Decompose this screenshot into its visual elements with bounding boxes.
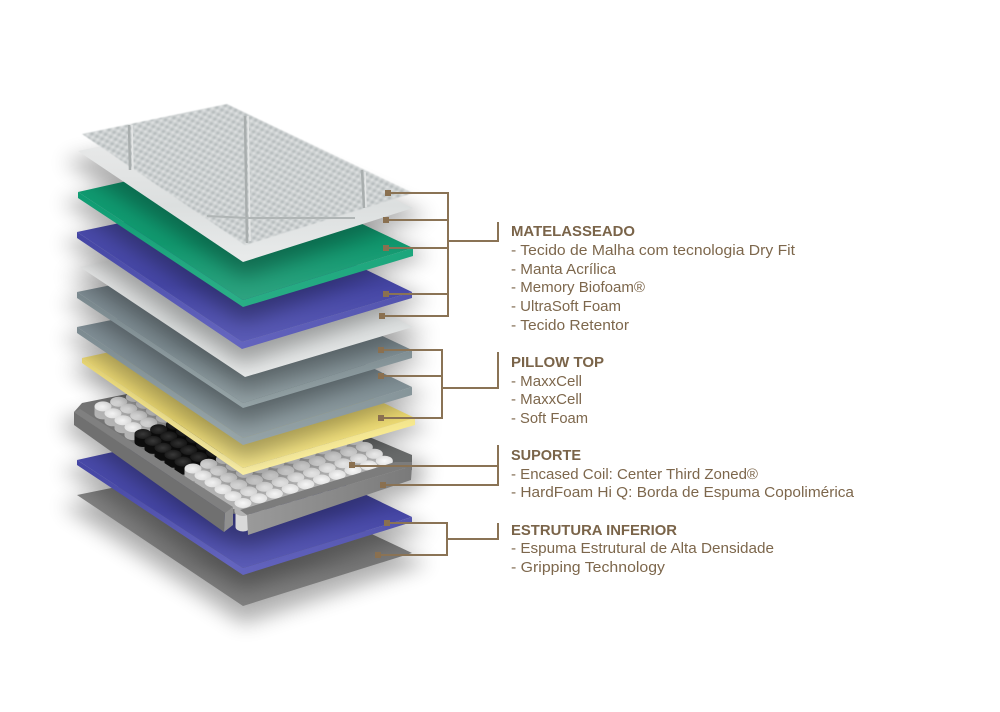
white coils front zone	[184, 421, 393, 532]
text block: pillow top: PILLOW TOP	[511, 354, 604, 371]
bracket: estrutura inferior	[375, 520, 498, 558]
layer: tecido retentor	[66, 236, 428, 392]
text block: matelasseado: - Tecido Retentor	[511, 317, 629, 334]
layer: blue UltraSoft foam	[62, 201, 428, 364]
text block: suporte: SUPORTE	[511, 447, 581, 464]
layer: manta acrilica	[64, 121, 428, 277]
text block: estrutura inferior: - Gripping Technology	[511, 559, 666, 576]
layer: MaxxCell lower	[62, 297, 428, 460]
text block: pillow top: - MaxxCell	[511, 391, 582, 408]
bracket: pillow top	[378, 347, 498, 421]
layer: quilted knit fabric	[82, 104, 413, 245]
text block: pillow top	[511, 354, 604, 427]
text block: pillow top: - Soft Foam	[511, 410, 588, 427]
layer: green Memory Biofoam	[62, 159, 429, 322]
text block: pillow top: - MaxxCell	[511, 373, 582, 390]
text block: matelasseado: - Tecido de Malha com tecnologia Dry Fit	[511, 242, 796, 259]
bracket: matelasseado	[379, 190, 498, 319]
right foam rail	[240, 462, 412, 535]
back right rail	[362, 436, 412, 470]
quilting seams	[129, 116, 366, 243]
layer: MaxxCell upper	[62, 262, 428, 424]
spring unit floor	[74, 394, 412, 515]
layer: gripping base	[62, 465, 428, 624]
bracket: suporte	[349, 445, 498, 488]
left foam rail	[74, 409, 233, 532]
text block: suporte: - Encased Coil: Center Third Zoned®	[511, 466, 758, 483]
text block: estrutura inferior	[511, 522, 774, 576]
text block: matelasseado: - Memory Biofoam®	[511, 279, 645, 296]
white coils back zone	[94, 359, 283, 440]
text block: suporte: - HardFoam Hi Q: Borda de Espuma Copolimérica	[511, 484, 855, 501]
text block: matelasseado: - Manta Acrílica	[511, 261, 617, 278]
text block: suporte	[511, 447, 855, 501]
text block: estrutura inferior: ESTRUTURA INFERIOR	[511, 522, 677, 539]
black coils center zone	[134, 387, 333, 475]
text block: matelasseado	[511, 223, 796, 334]
text block: estrutura inferior: - Espuma Estrutural de Alta Densidade	[511, 540, 774, 557]
layer: encased coil spring unit	[62, 359, 428, 548]
text block: matelasseado: - UltraSoft Foam	[511, 298, 621, 315]
text block: matelasseado: MATELASSEADO	[511, 223, 635, 240]
layer: yellow soft foam	[68, 327, 430, 490]
layer: lower blue structural foam	[62, 427, 428, 590]
